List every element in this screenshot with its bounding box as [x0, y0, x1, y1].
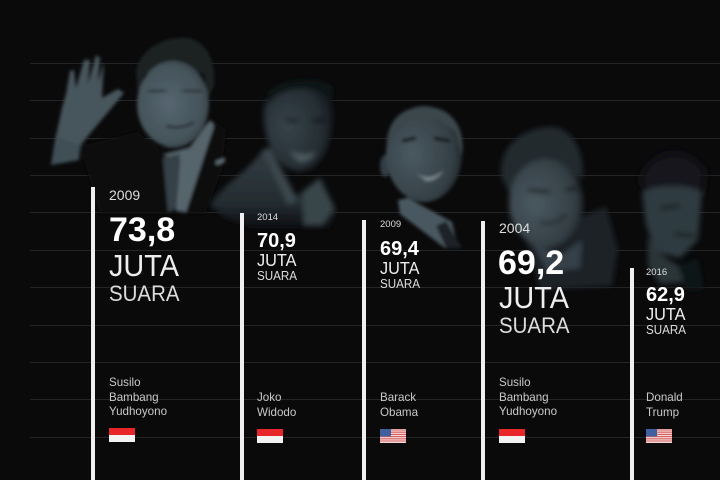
column: 2009 Barack Obama 69,4: Barack	[380, 391, 416, 404]
column: 2009 Susilo Bambang Yudhoyono 73,8: Susilo	[109, 376, 141, 389]
column: 2014 Joko Widodo 70,9: SUARA	[257, 269, 297, 283]
column: 2004 Susilo Bambang Yudhoyono 69,2: 2004	[499, 220, 530, 236]
column: 2014 Joko Widodo 70,9: Joko	[257, 391, 282, 404]
flag: United States	[380, 429, 406, 443]
column: 2009 Susilo Bambang Yudhoyono 73,8: Bambang	[109, 391, 159, 404]
column: 2016 Donald Trump 62,9: JUTA	[646, 304, 685, 324]
column: 2004 Susilo Bambang Yudhoyono 69,2: JUTA	[499, 280, 569, 315]
column: 2009 Barack Obama 69,4: Obama	[380, 406, 418, 419]
portrait: Barack Obama	[380, 106, 463, 248]
flag: Indonesia	[257, 429, 283, 443]
portrait: Joko Widodo	[210, 80, 336, 228]
column: 2014 Joko Widodo 70,9: 2014	[257, 212, 278, 223]
column: 2004 Susilo Bambang Yudhoyono 69,2: 69,2	[498, 244, 564, 282]
column: 2004 Susilo Bambang Yudhoyono 69,2: SUARA	[499, 313, 569, 338]
column: 2009 Susilo Bambang Yudhoyono 73,8: 2009	[109, 187, 140, 203]
portrait: Donald Trump	[640, 154, 705, 196]
flag: Indonesia	[499, 429, 525, 443]
column: 2014 Joko Widodo 70,9: JUTA	[257, 250, 296, 270]
column: 2014 Joko Widodo 70,9: 70,9	[257, 230, 296, 252]
column: 2009 Susilo Bambang Yudhoyono 73,8: 73,8	[109, 211, 175, 249]
column: 2004 Susilo Bambang Yudhoyono 69,2: Yudhoyono	[499, 405, 557, 418]
flag: United States	[646, 429, 672, 443]
column: 2004 Susilo Bambang Yudhoyono 69,2: Susilo	[499, 376, 531, 389]
column: 2009 Barack Obama 69,4: SUARA	[380, 277, 420, 291]
column: 2004 Susilo Bambang Yudhoyono 69,2: Bambang	[499, 391, 549, 404]
column: 2014 Joko Widodo 70,9: Widodo	[257, 406, 296, 419]
portrait: Susilo Bambang Yudhoyono waving	[51, 38, 226, 214]
portrait: Susilo Bambang Yudhoyono 2004	[501, 127, 618, 290]
column: 2016 Donald Trump 62,9: 2016	[646, 267, 667, 278]
column: 2016 Donald Trump 62,9: SUARA	[646, 323, 686, 337]
flag: Indonesia	[109, 428, 135, 442]
column: 2009 Susilo Bambang Yudhoyono 73,8: JUTA	[109, 248, 179, 283]
column: 2009 Barack Obama 69,4: 69,4	[380, 238, 419, 260]
column: 2016 Donald Trump 62,9: 62,9	[646, 284, 685, 306]
column: 2009 Susilo Bambang Yudhoyono 73,8: Yudhoyono	[109, 405, 167, 418]
column: 2009 Susilo Bambang Yudhoyono 73,8: SUARA	[109, 281, 179, 306]
column: 2016 Donald Trump 62,9: Trump	[646, 406, 679, 419]
column: 2009 Barack Obama 69,4: JUTA	[380, 258, 419, 278]
column: 2016 Donald Trump 62,9: Donald	[646, 391, 683, 404]
column: 2009 Barack Obama 69,4: 2009	[380, 219, 401, 230]
